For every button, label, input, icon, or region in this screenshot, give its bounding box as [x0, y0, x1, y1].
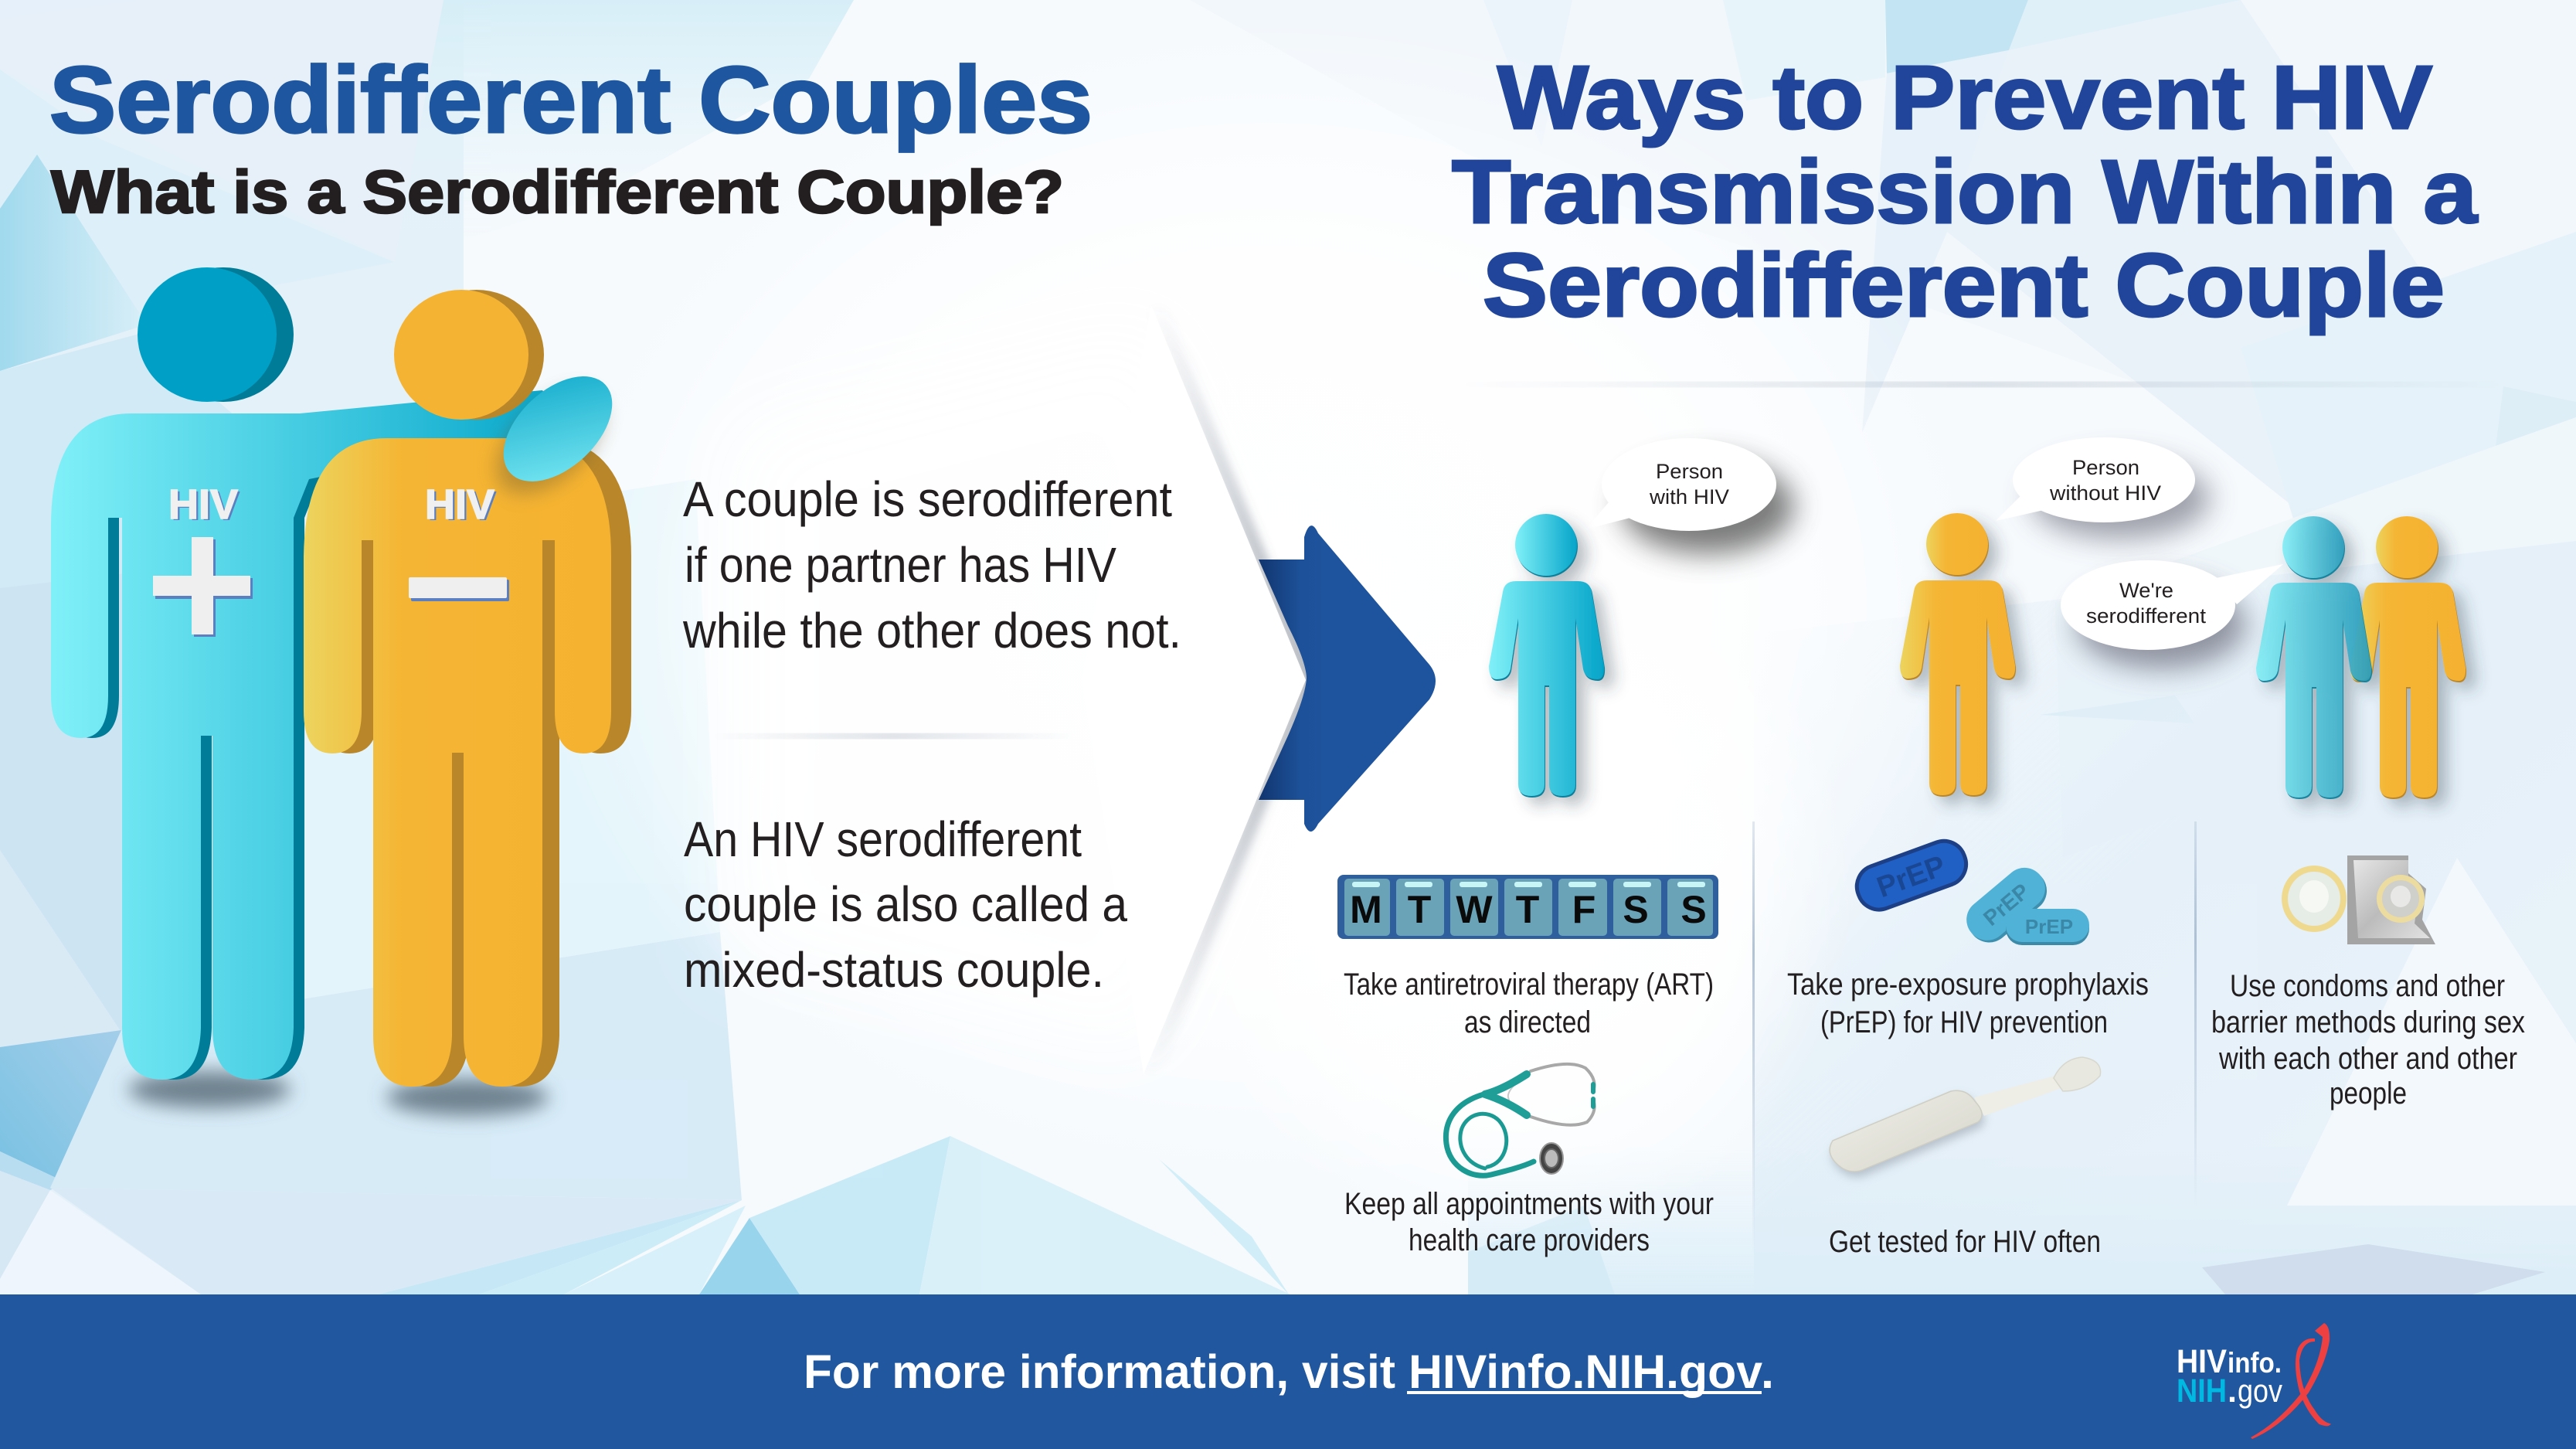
logo: HIVinfo.NIH.gov with red ribbon: .: [2228, 1372, 2237, 1410]
definition text: [682, 471, 1181, 658]
mixed-status text: An HIV serodifferent: [684, 811, 1082, 867]
icon: weekly pill box: [1337, 875, 1718, 939]
medium light pill: [1959, 859, 2055, 951]
icon: minus sign: [409, 577, 509, 601]
left subtitle: What is a Serodifferent Couple?: [51, 158, 1064, 226]
appointments text: health care providers: [1409, 1223, 1650, 1257]
footer text: For more information, visit: [804, 1345, 1395, 1398]
HIV label orange: HIV: [425, 481, 494, 528]
PrEP text: Take pre-exposure prophylaxis: [1787, 968, 2149, 1002]
icon: weekly pill box: W: [1456, 888, 1493, 931]
blue hand on shoulder: [477, 356, 632, 513]
small light pill: [2006, 909, 2089, 945]
barrier methods text: people: [2330, 1077, 2407, 1111]
barrier methods text: Use condoms and other: [2230, 969, 2505, 1003]
blue figure: [51, 267, 583, 1080]
icon: weekly pill box: M: [1350, 888, 1382, 931]
icon: stethoscope: [1446, 1064, 1595, 1175]
illustration: serodifferent couple with HIV plus and minus: [51, 267, 632, 1116]
bubble: we're serodifferent: We're: [2119, 579, 2173, 602]
chevron white panel with shadow edge: [734, 305, 1309, 1074]
left title: Serodifferent Couples: [49, 47, 1093, 152]
definition text: A couple is serodifferent: [683, 471, 1172, 527]
bubble: person without HIV: without HIV: [2049, 481, 2161, 505]
ART text: as directed: [1464, 1005, 1591, 1039]
definition text: while the other does not.: [682, 603, 1181, 658]
icon: weekly pill box: T: [1516, 888, 1539, 931]
PrEP text: [1787, 968, 2149, 1039]
mixed-status text: mixed-status couple.: [684, 942, 1104, 998]
bubble: person with HIV: [1585, 438, 1794, 554]
orange figure: [304, 290, 631, 1087]
footer link: HIVinfo.NIH.gov: [1409, 1345, 1762, 1398]
HIV label blue: HIV: [171, 483, 240, 529]
footer period: .: [1761, 1345, 1774, 1398]
icon: plus sign: [153, 537, 253, 637]
bubble: person with HIV: with HIV: [1649, 485, 1729, 509]
ART text: [1344, 968, 1714, 1039]
column dividers: [1752, 821, 2197, 1254]
floor shadows: [128, 1071, 549, 1116]
couple figures: [2256, 516, 2466, 799]
HIV label orange: HIV: [427, 483, 497, 529]
logo: HIVinfo.NIH.gov with red ribbon: [2177, 1323, 2330, 1439]
large blue pill: [1850, 835, 1972, 916]
barrier methods text: [2211, 969, 2525, 1111]
logo: HIVinfo.NIH.gov with red ribbon: info.: [2228, 1347, 2282, 1379]
icon: weekly pill box: S: [1681, 888, 1707, 931]
blue partner: [2256, 516, 2372, 799]
right title: Ways to Prevent HIV: [1497, 47, 2432, 148]
icon: weekly pill box: S: [1623, 888, 1649, 931]
appointments text: Keep all appointments with your: [1344, 1187, 1714, 1221]
mixed-status text: couple is also called a: [684, 876, 1127, 932]
right title: [1452, 47, 2479, 335]
barrier methods text: barrier methods during sex: [2211, 1005, 2525, 1039]
footer band: [0, 1294, 2576, 1449]
arrow: [1259, 526, 1436, 832]
person with HIV: [1489, 514, 1605, 798]
appointments text: [1344, 1187, 1714, 1257]
icon: PrEP pills: [1850, 835, 2089, 951]
bubble: we're serodifferent: serodifferent: [2086, 604, 2207, 628]
bubble: person without HIV: [1996, 437, 2210, 539]
bubble: person without HIV: Person: [2072, 456, 2139, 479]
person without HIV: [1900, 513, 2016, 797]
icon: self-test swab: [1830, 1057, 2101, 1177]
mixed-status text: [684, 811, 1127, 998]
logo: HIVinfo.NIH.gov with red ribbon: HIV: [2177, 1343, 2227, 1380]
right title: Serodifferent Couple: [1483, 235, 2445, 335]
orange partner: [2350, 516, 2466, 799]
PrEP text: (PrEP) for HIV prevention: [1820, 1005, 2108, 1039]
barrier methods text: with each other and other: [2218, 1042, 2517, 1076]
logo: HIVinfo.NIH.gov with red ribbon: NIH: [2177, 1372, 2227, 1410]
large blue pill: PrEP: [1873, 850, 1950, 904]
ART text: Take antiretroviral therapy (ART): [1344, 968, 1714, 1002]
logo: HIVinfo.NIH.gov with red ribbon: gov: [2238, 1372, 2282, 1409]
icon: weekly pill box: F: [1572, 888, 1596, 931]
medium light pill: PrEP: [1979, 879, 2034, 930]
icon: condoms and packet: [2282, 855, 2435, 944]
definition text: if one partner has HIV: [685, 537, 1116, 593]
bubble: we're serodifferent: [2061, 560, 2283, 669]
HIV label blue: HIV: [168, 481, 238, 528]
bubble: person with HIV: Person: [1656, 460, 1723, 483]
icon: weekly pill box: T: [1408, 888, 1431, 931]
right title: Transmission Within a: [1452, 141, 2479, 242]
test text: Get tested for HIV often: [1829, 1225, 2101, 1259]
small light pill: PrEP: [2025, 915, 2073, 938]
